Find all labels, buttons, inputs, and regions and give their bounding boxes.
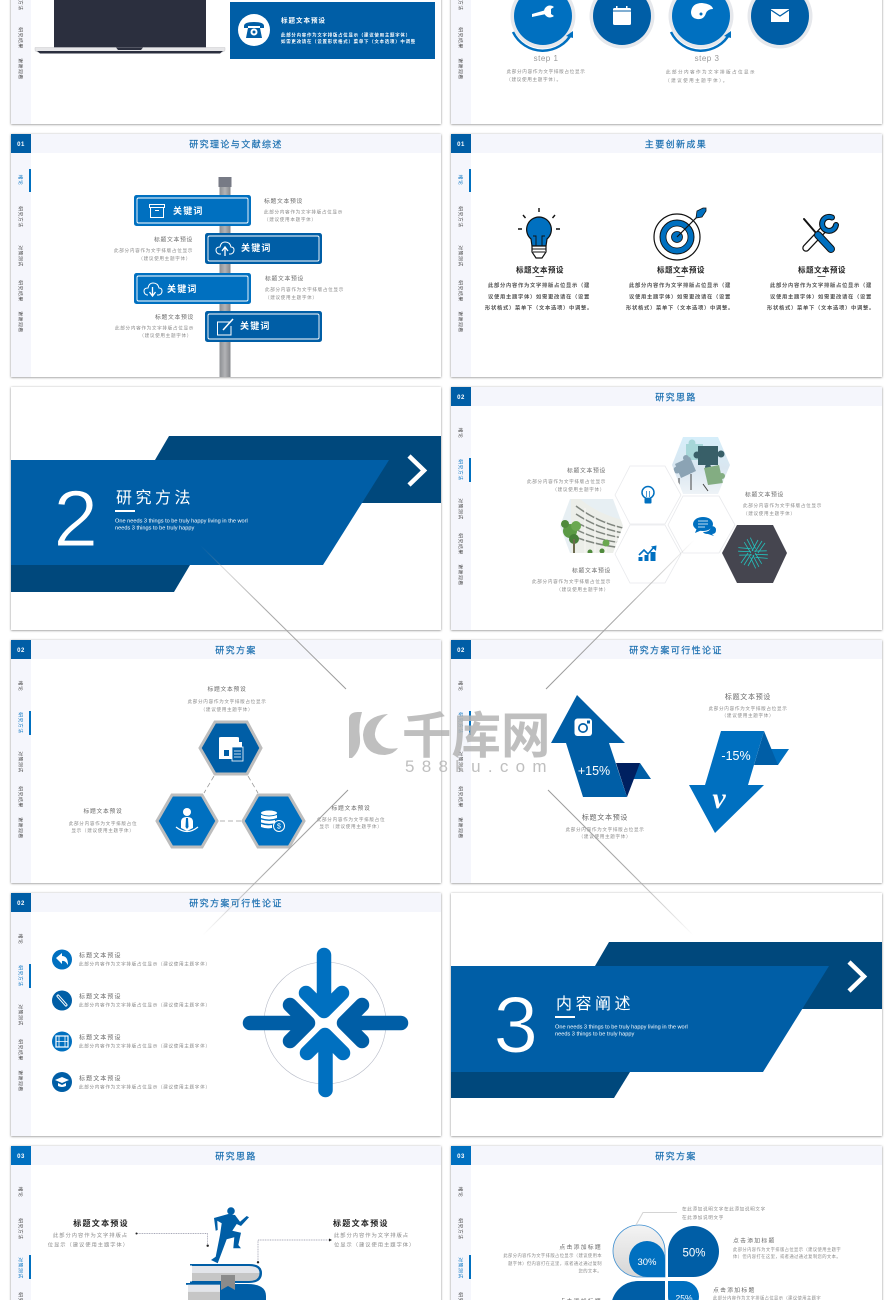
section badge: 03 — [457, 1154, 465, 1160]
callout left: 位显示（建议使用主题字体） — [48, 1240, 129, 1248]
sign 4 — [205, 311, 322, 342]
section title: One needs 3 things to be truly happy living in the worl — [555, 1024, 688, 1030]
text block top: （建议使用主题字体） — [201, 706, 253, 713]
text block right: 显示（建议使用主题字体） — [319, 823, 383, 830]
icon: edit pencil — [218, 319, 233, 335]
sign 2: 关键词 — [241, 242, 272, 253]
innovation column 2: 标题文本预设 — [657, 264, 705, 274]
callout right: 位显示（建议使用主题字体） — [334, 1240, 415, 1248]
text block right: 标题文本预设 — [332, 804, 370, 812]
callout: blue text box — [230, 2, 435, 59]
sidebar navigation: 研究结果 — [457, 280, 464, 302]
sidebar navigation — [17, 934, 31, 1092]
icon: instagram — [574, 718, 592, 736]
text block bottom: （建议使用主题字体） — [579, 833, 631, 840]
sidebar navigation: 谢谢观看 — [17, 58, 24, 80]
text block 4: 此部分内容作为文字排版占位显示 — [115, 324, 194, 332]
icon: runner — [211, 1207, 249, 1263]
sidebar navigation: 研究结果 — [457, 533, 464, 555]
text block left: 题字体）但内容打在这里，或者通过通过复制 — [508, 1260, 602, 1267]
sidebar navigation: 谢谢观看 — [457, 311, 464, 333]
text block right: 此部分内容作为文字排版占位显示（建议使用主题字 — [733, 1246, 841, 1253]
section badge: 02 — [457, 648, 465, 654]
callout right: 标题文本预设 — [333, 1218, 389, 1228]
section badge: 02 — [17, 901, 25, 907]
sign 2 — [205, 233, 322, 264]
down arrow -15% — [689, 731, 789, 833]
sidebar navigation — [457, 1187, 471, 1300]
sign 1 — [134, 195, 251, 226]
sidebar navigation: 对策测试 — [17, 245, 24, 267]
sidebar navigation: 研究结果 — [17, 280, 24, 302]
callout left — [48, 1218, 209, 1248]
innovation column 2 — [626, 264, 734, 312]
list item 1: 此部分内容作为文字排版占位显示（建议使用主题字体） — [79, 960, 211, 968]
text block left: 点击添加标题 — [559, 1243, 602, 1251]
petal 25% — [668, 1281, 699, 1300]
callout top: 在此添加说明文字 — [682, 1214, 724, 1221]
pinwheel pattern — [736, 536, 770, 570]
list item 4 — [52, 1072, 211, 1092]
text block top — [188, 685, 266, 713]
text block left — [69, 807, 137, 834]
text block bottom: 标题文本预设 — [582, 812, 628, 822]
panel: section 3 divider — [451, 893, 882, 1136]
text block top right: 标题文本预设 — [725, 692, 771, 701]
sign 3 — [134, 273, 251, 304]
text block top right: （建议使用主题字体） — [722, 712, 774, 719]
section badge: 02 — [457, 395, 465, 401]
icon: chevron arrow — [409, 456, 424, 485]
icon: stacked books — [186, 1264, 266, 1300]
step 3 label: （建议使用主题字体）。 — [665, 77, 729, 84]
text block 3: （建议使用主题字体） — [265, 294, 318, 301]
text block top left — [527, 466, 606, 493]
panel: converging arrows slide — [11, 893, 441, 1136]
sidebar navigation: 研究结果 — [457, 786, 464, 808]
section badge — [451, 1146, 471, 1165]
sidebar navigation: 谢谢观看 — [457, 817, 464, 839]
heading: 主要创新成果 — [645, 138, 707, 150]
text block top left: （建议使用主题字体） — [552, 486, 605, 493]
callout top: 在此添加说明文字在此添加说明文字 — [682, 1206, 766, 1212]
sidebar navigation: 对策测试 — [17, 1004, 24, 1026]
sidebar navigation: 研究方法 — [457, 712, 464, 734]
sidebar navigation: 绪论 — [17, 681, 24, 691]
banner shapes — [451, 942, 882, 1098]
sign 1: 关键词 — [173, 205, 204, 216]
heading: 研究方案 — [655, 1150, 697, 1162]
section badge: 01 — [17, 142, 25, 148]
text block left: 此部分内容作为文字排版占位显示（建议使用本 — [503, 1252, 602, 1259]
sidebar navigation: 研究方法 — [457, 1218, 464, 1240]
logo mark — [349, 712, 398, 758]
hexagon: coins — [243, 795, 304, 847]
sidebar navigation — [17, 169, 31, 333]
photo: puzzle hexagon — [672, 437, 730, 494]
step 2 circle — [590, 0, 654, 48]
text block 2: 此部分内容作为文字排版占位显示 — [114, 247, 193, 254]
converging arrows — [250, 955, 401, 1090]
text block 4 — [115, 313, 194, 339]
logo wordmark: 千库网 — [402, 709, 550, 764]
sidebar navigation: 研究方法 — [17, 206, 24, 228]
sidebar navigation — [457, 169, 471, 333]
list item 4: 标题文本预设 — [79, 1074, 122, 1082]
sidebar navigation: 绪论 — [17, 934, 24, 944]
outlined hexagons — [615, 466, 735, 583]
up arrow +15%: +15% — [578, 764, 610, 778]
petal 50% — [668, 1226, 719, 1277]
section badge — [451, 387, 471, 406]
text block right — [743, 490, 822, 517]
text block bottom left: 此部分内容作为文字排版占位显示 — [532, 578, 611, 585]
laptop illustration — [35, 0, 225, 54]
text block right: 此部分内容作为文字排版占位 — [317, 816, 385, 823]
list item 4: 此部分内容作为文字排版占位显示（建议使用主题字体） — [79, 1084, 211, 1090]
text block right: 体）但内容打在这里，或者通过通过复制您的文本。 — [733, 1253, 841, 1260]
innovation column 3: 标题文本预设 — [798, 264, 846, 274]
sidebar navigation: 研究结果 — [17, 1039, 24, 1061]
down arrow -15%: -15% — [721, 749, 751, 763]
text block lower right: 点击添加标题 — [713, 1286, 756, 1294]
sidebar navigation: 绪论 — [457, 1187, 464, 1197]
section number: 3 — [494, 980, 538, 1069]
text block right: 此部分内容作为文字排版占位显示 — [743, 502, 822, 509]
callout text: 此部分内容作为文字排版占位显示（建议使用主题字体） — [281, 32, 411, 38]
sidebar navigation — [17, 0, 24, 80]
sidebar navigation — [457, 428, 471, 586]
list item 3 — [52, 1032, 211, 1052]
section badge — [451, 134, 471, 153]
text block top right: 此部分内容作为文字排版占位显示 — [709, 705, 787, 712]
hexagon: briefcase — [200, 722, 261, 774]
dashed connectors — [204, 776, 258, 821]
up arrow +15% — [551, 695, 651, 797]
sidebar navigation: 研究结果 — [457, 27, 464, 49]
banner shapes — [11, 436, 441, 592]
sidebar navigation: 谢谢观看 — [17, 311, 24, 333]
innovation column 2: 此部分内容作为文字排版占位显示（建 — [629, 281, 731, 289]
callout left: 此部分内容作为文字排版占 — [53, 1231, 128, 1239]
petal 50%: 50% — [682, 1248, 706, 1260]
sidebar navigation: 研究方法 — [17, 1218, 24, 1240]
sidebar navigation: 绪论 — [17, 175, 24, 185]
step 3 label — [665, 54, 756, 84]
innovation column 3: 形状格式）菜单下（文本选项）中调整。 — [767, 304, 875, 312]
section badge: 01 — [457, 142, 465, 148]
heading: 研究思路 — [215, 1150, 257, 1162]
sidebar navigation: 绪论 — [17, 1187, 24, 1197]
innovation column 3: 此部分内容作为文字排版占位显示（建 — [770, 281, 872, 289]
icon: vimeo: v — [712, 782, 726, 815]
text block 3: 标题文本预设 — [265, 274, 304, 282]
photo: building hexagon — [560, 499, 623, 554]
step 1 circle — [510, 0, 576, 51]
text block 1 — [264, 197, 343, 223]
icon: growth chart — [638, 546, 656, 561]
innovation column 1: 形状格式）菜单下（文本选项）中调整。 — [485, 304, 593, 312]
panel: laptop slide — [11, 0, 441, 124]
heading: 研究方案 — [215, 644, 257, 656]
sidebar navigation: 绪论 — [457, 428, 464, 438]
icon: target with arrow — [654, 208, 706, 260]
list item 2 — [52, 990, 211, 1010]
dark pattern hexagon — [722, 525, 787, 583]
text block 4: 标题文本预设 — [155, 313, 194, 321]
callout text — [281, 16, 416, 45]
sign 4: 关键词 — [240, 320, 271, 331]
step 1 label: step 1 — [534, 54, 558, 63]
list item 2: 此部分内容作为文字排版占位显示（建议使用主题字体） — [79, 1002, 211, 1008]
panel: feasibility arrows slide — [451, 640, 882, 883]
section badge — [11, 640, 31, 659]
sidebar navigation — [17, 681, 31, 839]
section title: 研究方法 — [116, 489, 194, 507]
step 3 label: 此部分内容作为文字排版占位显示 — [666, 68, 756, 76]
sidebar navigation — [457, 0, 464, 80]
text block lower right — [713, 1286, 821, 1300]
panel: steps slide — [451, 0, 882, 124]
sidebar navigation: 研究方法 — [17, 965, 24, 987]
section badge: 02 — [17, 648, 25, 654]
panel: literature review slide — [11, 134, 441, 377]
text block right — [733, 1236, 841, 1260]
text block 1: 此部分内容作为文字排版占位显示 — [264, 208, 343, 216]
list item 1: 标题文本预设 — [79, 952, 122, 960]
thin circle — [264, 962, 386, 1084]
text block 2: （建议使用主题字体） — [138, 255, 191, 262]
petal 30%: 30% — [637, 1257, 657, 1268]
sidebar navigation: 对策测试 — [17, 1257, 24, 1279]
innovation column 1: 此部分内容作为文字排版占位显示（建 — [488, 281, 590, 289]
callout text: 如需更改请在（设置形状格式）菜单下（文本选项）中调整 — [281, 38, 416, 45]
logo url: 588ku.com — [405, 757, 554, 776]
heading: 研究理论与文献综述 — [189, 138, 283, 150]
icon: telephone — [238, 14, 270, 46]
text block 3: 此部分内容作为文字排版占位显示 — [265, 286, 344, 293]
heading: 研究方案可行性论证 — [629, 644, 723, 656]
sidebar navigation: 研究结果 — [17, 786, 24, 808]
text block right: （建议使用主题字体） — [743, 510, 796, 517]
sidebar navigation: 研究结果 — [17, 27, 24, 49]
sidebar navigation: 谢谢观看 — [457, 564, 464, 586]
sidebar navigation: 对策测试 — [457, 498, 464, 520]
text block bottom — [566, 812, 644, 840]
watermark: logo — [349, 709, 554, 776]
section badge — [11, 893, 31, 912]
text block 1: 标题文本预设 — [264, 197, 303, 205]
text block 2: 标题文本预设 — [154, 236, 193, 244]
text block 4: （建议使用主题字体） — [139, 332, 192, 339]
sign 3: 关键词 — [167, 283, 198, 294]
text block 2 — [114, 236, 193, 262]
sidebar navigation: 绪论 — [457, 681, 464, 691]
section badge — [11, 1146, 31, 1165]
callout text: 标题文本预设 — [281, 16, 326, 24]
text block top left: 此部分内容作为文字排版占位显示 — [527, 478, 606, 485]
callout right: 此部分内容作为文字排版占 — [334, 1231, 409, 1239]
step 1 label: （建议使用主题字体）。 — [506, 76, 562, 83]
sidebar navigation: 对策测试 — [457, 1257, 464, 1279]
sidebar navigation: 研究方法 — [457, 206, 464, 228]
section badge — [11, 134, 31, 153]
section badge — [451, 640, 471, 659]
icon: archive box — [150, 204, 164, 218]
icon: cloud download — [144, 283, 162, 296]
icon: speech bubbles — [693, 517, 716, 536]
text block top: 标题文本预设 — [208, 685, 246, 693]
innovation column 2: 议使用主题字体）如需更改请在（设置 — [629, 292, 731, 300]
text block bottom left: 标题文本预设 — [572, 566, 611, 574]
text block left: 标题文本预设 — [84, 807, 122, 815]
section title: needs 3 things to be truly happy — [555, 1032, 635, 1038]
text block top right — [709, 692, 787, 719]
innovation column 1: 标题文本预设 — [516, 264, 564, 274]
section title: 内容阐述 — [556, 995, 634, 1013]
text block left: 您的文本。 — [579, 1268, 602, 1274]
callout left: 标题文本预设 — [73, 1218, 129, 1228]
text block left: 显示（建议使用主题字体） — [71, 827, 135, 834]
sidebar navigation: 绪论 — [457, 175, 464, 185]
list item 3: 此部分内容作为文字排版占位显示（建议使用主题字体） — [79, 1042, 211, 1050]
text block right: 点击添加标题 — [733, 1236, 776, 1244]
text block 1: （建议使用本题字体） — [264, 216, 317, 223]
icon: bulb — [642, 486, 654, 504]
text block right — [317, 804, 385, 830]
callout right — [257, 1218, 415, 1264]
sidebar navigation: 谢谢观看 — [17, 1070, 24, 1092]
sidebar navigation — [457, 681, 471, 839]
hexagon: coins: $ — [277, 824, 281, 830]
section title — [115, 489, 248, 532]
list item 2: 标题文本预设 — [79, 992, 122, 1000]
step 1 label: 此部分内容作为文字排版占位显示 — [507, 68, 585, 75]
icon: light bulb — [518, 208, 560, 258]
text block bottom left: （建议使用主题字体） — [556, 586, 609, 593]
signpost pole — [218, 177, 232, 377]
section badge: 03 — [17, 1154, 25, 1160]
section title: needs 3 things to be truly happy — [115, 526, 195, 532]
sidebar navigation — [17, 1187, 31, 1300]
sidebar navigation: 对策测试 — [457, 751, 464, 773]
sidebar navigation: 谢谢观看 — [17, 817, 24, 839]
panel: runner on books slide — [11, 1146, 441, 1300]
panel: innovation results slide — [451, 134, 882, 377]
sidebar navigation: 对策测试 — [17, 751, 24, 773]
petal 30% — [613, 1225, 665, 1277]
section number: 2 — [54, 474, 98, 563]
hexagon: meditating person — [157, 795, 217, 847]
step 3 circle — [668, 0, 734, 51]
icon: cloud upload — [216, 242, 234, 256]
text block bottom left — [532, 566, 611, 593]
text block top left: 标题文本预设 — [567, 466, 606, 474]
heading: 研究方案可行性论证 — [189, 898, 283, 908]
innovation column 3: 议使用主题字体）如需更改请在（设置 — [770, 292, 872, 300]
panel: research plan hexagons — [11, 640, 441, 883]
step 4 circle — [748, 0, 812, 48]
callout top — [636, 1206, 766, 1225]
panel: petal chart slide — [451, 1146, 882, 1300]
text block bottom: 此部分内容作为文字排版占位显示 — [566, 826, 644, 833]
innovation column 1 — [485, 264, 593, 312]
heading: 研究思路 — [655, 392, 697, 402]
section title — [555, 995, 688, 1038]
panel: section 2 divider — [11, 387, 441, 630]
text block right: 标题文本预设 — [745, 490, 784, 498]
section title: One needs 3 things to be truly happy living in the worl — [115, 518, 248, 524]
sidebar navigation: 谢谢观看 — [457, 58, 464, 80]
innovation column 3 — [767, 264, 875, 312]
text block 3 — [265, 274, 344, 301]
step 3 label: step 3 — [695, 54, 719, 63]
icon: tools — [804, 217, 836, 249]
text block left: 此部分内容作为文字排版占位 — [69, 820, 137, 827]
text block left — [503, 1243, 602, 1274]
petal bottom left — [611, 1281, 665, 1300]
innovation column 2: 形状格式）菜单下（文本选项）中调整。 — [626, 304, 734, 312]
list item 3: 标题文本预设 — [79, 1034, 122, 1042]
watermark: diagonal lines — [200, 540, 694, 935]
list item 1 — [52, 950, 211, 970]
step 1 label — [506, 54, 585, 83]
sidebar navigation: 对策测试 — [457, 245, 464, 267]
sidebar navigation: 研究方法 — [17, 712, 24, 734]
sidebar navigation: 研究方法 — [457, 459, 464, 481]
panel: research approach slide — [451, 387, 882, 630]
text block top: 此部分内容作为文字排版占位显示 — [188, 698, 266, 705]
innovation column 1: 议使用主题字体）如需更改请在（设置 — [488, 292, 590, 300]
icon: chevron arrow — [849, 962, 864, 991]
